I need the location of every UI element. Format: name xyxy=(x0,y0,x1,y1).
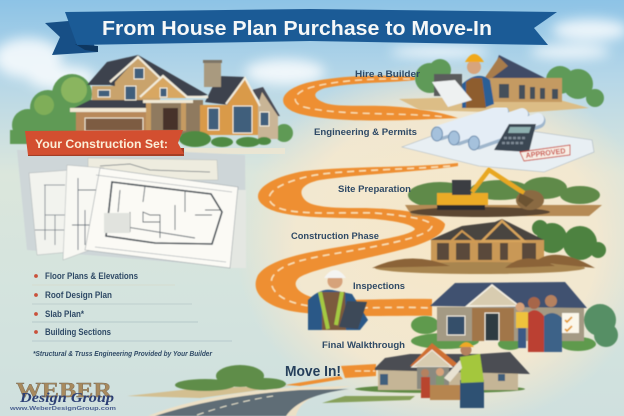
walls xyxy=(115,57,160,102)
sheet 1 xyxy=(29,170,70,255)
sheet 3: floor plan xyxy=(85,168,238,268)
trees xyxy=(10,74,293,144)
box and children xyxy=(421,369,429,377)
label: construction phase: Construction Phase xyxy=(291,231,379,242)
label: move in: Move In! xyxy=(285,364,341,380)
title text: From House Plan Purchase to Move-In xyxy=(102,17,492,40)
label: engineering and permits: Engineering & Permits xyxy=(314,127,417,138)
illustration: move in house and worker xyxy=(355,342,530,408)
windows xyxy=(98,68,269,133)
logo: weber design group: WEBER xyxy=(16,378,113,402)
main house illustration xyxy=(10,55,293,147)
label: final walkthrough: Final Walkthrough xyxy=(322,340,405,351)
list: construction set items: Roof Design Plan xyxy=(45,290,112,300)
illustration: inspector xyxy=(308,270,368,330)
orange winding road xyxy=(256,76,458,386)
illustration: final walkthrough house and family xyxy=(411,282,618,352)
sheet 2 xyxy=(63,165,104,260)
title banner xyxy=(45,9,557,55)
worker xyxy=(462,76,494,108)
illustration: engineering and permits xyxy=(402,111,594,172)
illustration: hire a builder xyxy=(399,54,604,113)
approved stamp: APPROVED xyxy=(525,146,566,160)
back sheet xyxy=(17,150,246,268)
logo: weber design group: www.WeberDesignGroup.com xyxy=(9,406,116,412)
worker xyxy=(460,380,484,408)
family xyxy=(542,313,562,352)
label: hire a builder: Hire a Builder xyxy=(355,69,420,80)
porch xyxy=(143,100,193,103)
logo: weber design group xyxy=(9,378,116,412)
banner: your construction set xyxy=(25,130,184,156)
roofs xyxy=(87,55,208,98)
label: inspections: Inspections xyxy=(353,281,405,292)
list: construction set items: Floor Plans & Elevations xyxy=(45,271,138,281)
garage xyxy=(85,118,143,131)
list: construction set items xyxy=(32,271,232,358)
bottom road and landscape xyxy=(127,365,415,416)
list: construction set items: Slab Plan* xyxy=(45,309,84,319)
illustration: construction phase xyxy=(372,219,606,274)
label: site preparation: Site Preparation xyxy=(338,184,411,195)
logo: weber design group: Design Group xyxy=(19,391,114,406)
checklist xyxy=(562,313,579,333)
banner: your construction set: Your Construction Set: xyxy=(35,139,168,151)
list: construction set items: Building Sections xyxy=(45,327,111,337)
footnote: *Structural & Truss Engineering Provided by Your Builder xyxy=(33,351,213,358)
shrubs xyxy=(179,131,271,147)
illustration: site preparation xyxy=(405,170,602,217)
panel: construction set sheets xyxy=(17,150,246,268)
